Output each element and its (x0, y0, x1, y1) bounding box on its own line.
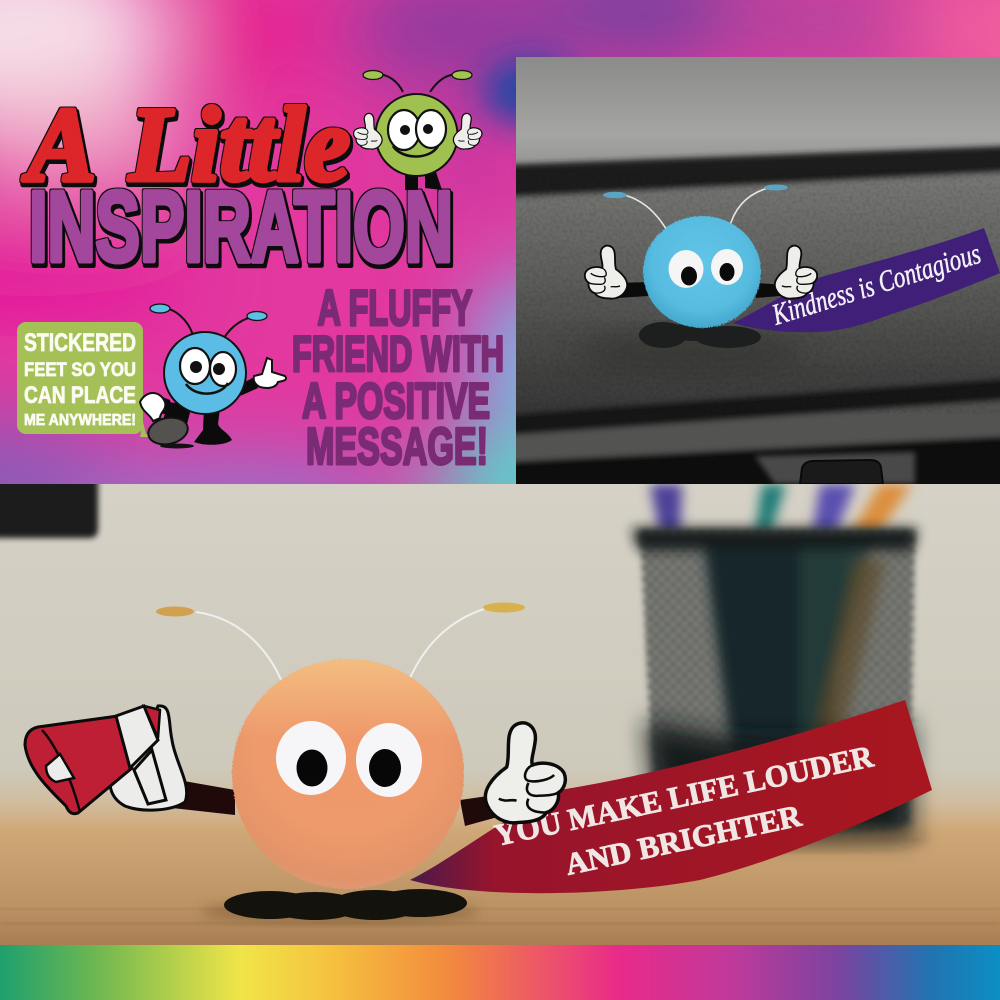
text block: a fluffy friend with a positive message: FRIEND WITH (292, 326, 504, 382)
googly eyes (668, 249, 743, 288)
title: INSPIRATION: INSPIRATION (29, 171, 453, 283)
mascot feet (224, 889, 467, 920)
title: A Little: A Little (22, 86, 350, 203)
callout: stickered feet note: ME ANYWHERE! (24, 412, 136, 429)
character: blue mascot pointing (140, 304, 286, 448)
banner: You make life louder and brighter (410, 700, 932, 893)
cartoon hands (585, 246, 817, 299)
antennae (603, 184, 788, 232)
character: green mascot thumbs up (354, 70, 482, 190)
callout: stickered feet note: CAN PLACE (24, 382, 136, 409)
mascot arms (172, 780, 505, 826)
callout: stickered feet note (17, 322, 166, 441)
callout: stickered feet note: FEET SO YOU (24, 360, 136, 381)
banner: You make life louder and brighter: YOU MAKE LIFE LOUDER (491, 738, 877, 853)
callout: stickered feet note: STICKERED (24, 329, 136, 357)
text block: a fluffy friend with a positive message (292, 280, 504, 476)
mascot arms (618, 282, 785, 298)
icon: thumbs up hand (485, 723, 565, 823)
photo: orange mascot on wooden desk (0, 470, 1000, 945)
rainbow footer band (0, 945, 1000, 1000)
fluffy blue body (643, 216, 761, 328)
panel: gradient background with title (0, 0, 1000, 484)
mascot feet (639, 322, 761, 348)
googly eyes (276, 721, 422, 797)
fluffy orange body (232, 659, 464, 889)
text block: a fluffy friend with a positive message: A FLUFFY (318, 280, 472, 336)
text block: a fluffy friend with a positive message: A POSITIVE (302, 373, 490, 429)
text block: a fluffy friend with a positive message: MESSAGE! (306, 418, 488, 476)
antennae (156, 602, 525, 680)
photo: blue mascot on car dashboard (500, 57, 1000, 490)
icon: megaphone with hand (25, 706, 187, 814)
pen holder (632, 484, 917, 838)
banner: You make life louder and brighter: AND BRIGHTER (562, 798, 805, 882)
